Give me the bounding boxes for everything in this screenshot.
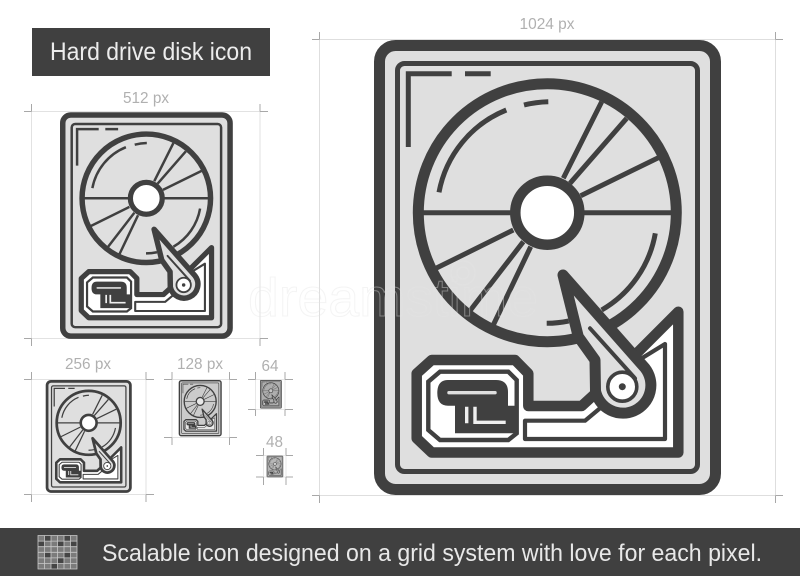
panel: 256 px icon preview <box>24 356 154 502</box>
icon: hard drive 64 <box>260 380 282 408</box>
watermark: dreamstime <box>248 268 538 328</box>
panel: 512 px icon preview <box>24 90 268 346</box>
title <box>32 28 270 76</box>
label: 48: 48 <box>266 434 283 451</box>
label: 256 px: 256 px <box>65 356 111 373</box>
label: 1024 px: 1024 px <box>520 16 574 33</box>
icon: hard drive 256 <box>47 381 130 491</box>
footer bar <box>0 528 800 576</box>
icon: pixel grid <box>38 536 77 569</box>
label: 128 px: 128 px <box>177 356 223 373</box>
title: Hard drive disk icon <box>50 38 252 66</box>
panel: 64 px icon preview <box>248 358 293 416</box>
icon: hard drive 128 <box>179 380 222 436</box>
label: 512 px: 512 px <box>123 90 169 107</box>
label: 64: 64 <box>262 358 279 375</box>
icon: hard drive 48 <box>267 456 283 477</box>
footer caption: Scalable icon designed on a grid system with love for each pixel. <box>102 540 762 567</box>
panel: 128 px icon preview <box>164 356 237 445</box>
icon: hard drive 512 <box>63 115 230 336</box>
icon: hard drive 1024 <box>380 46 716 490</box>
panel: 48 px icon preview <box>256 434 293 485</box>
